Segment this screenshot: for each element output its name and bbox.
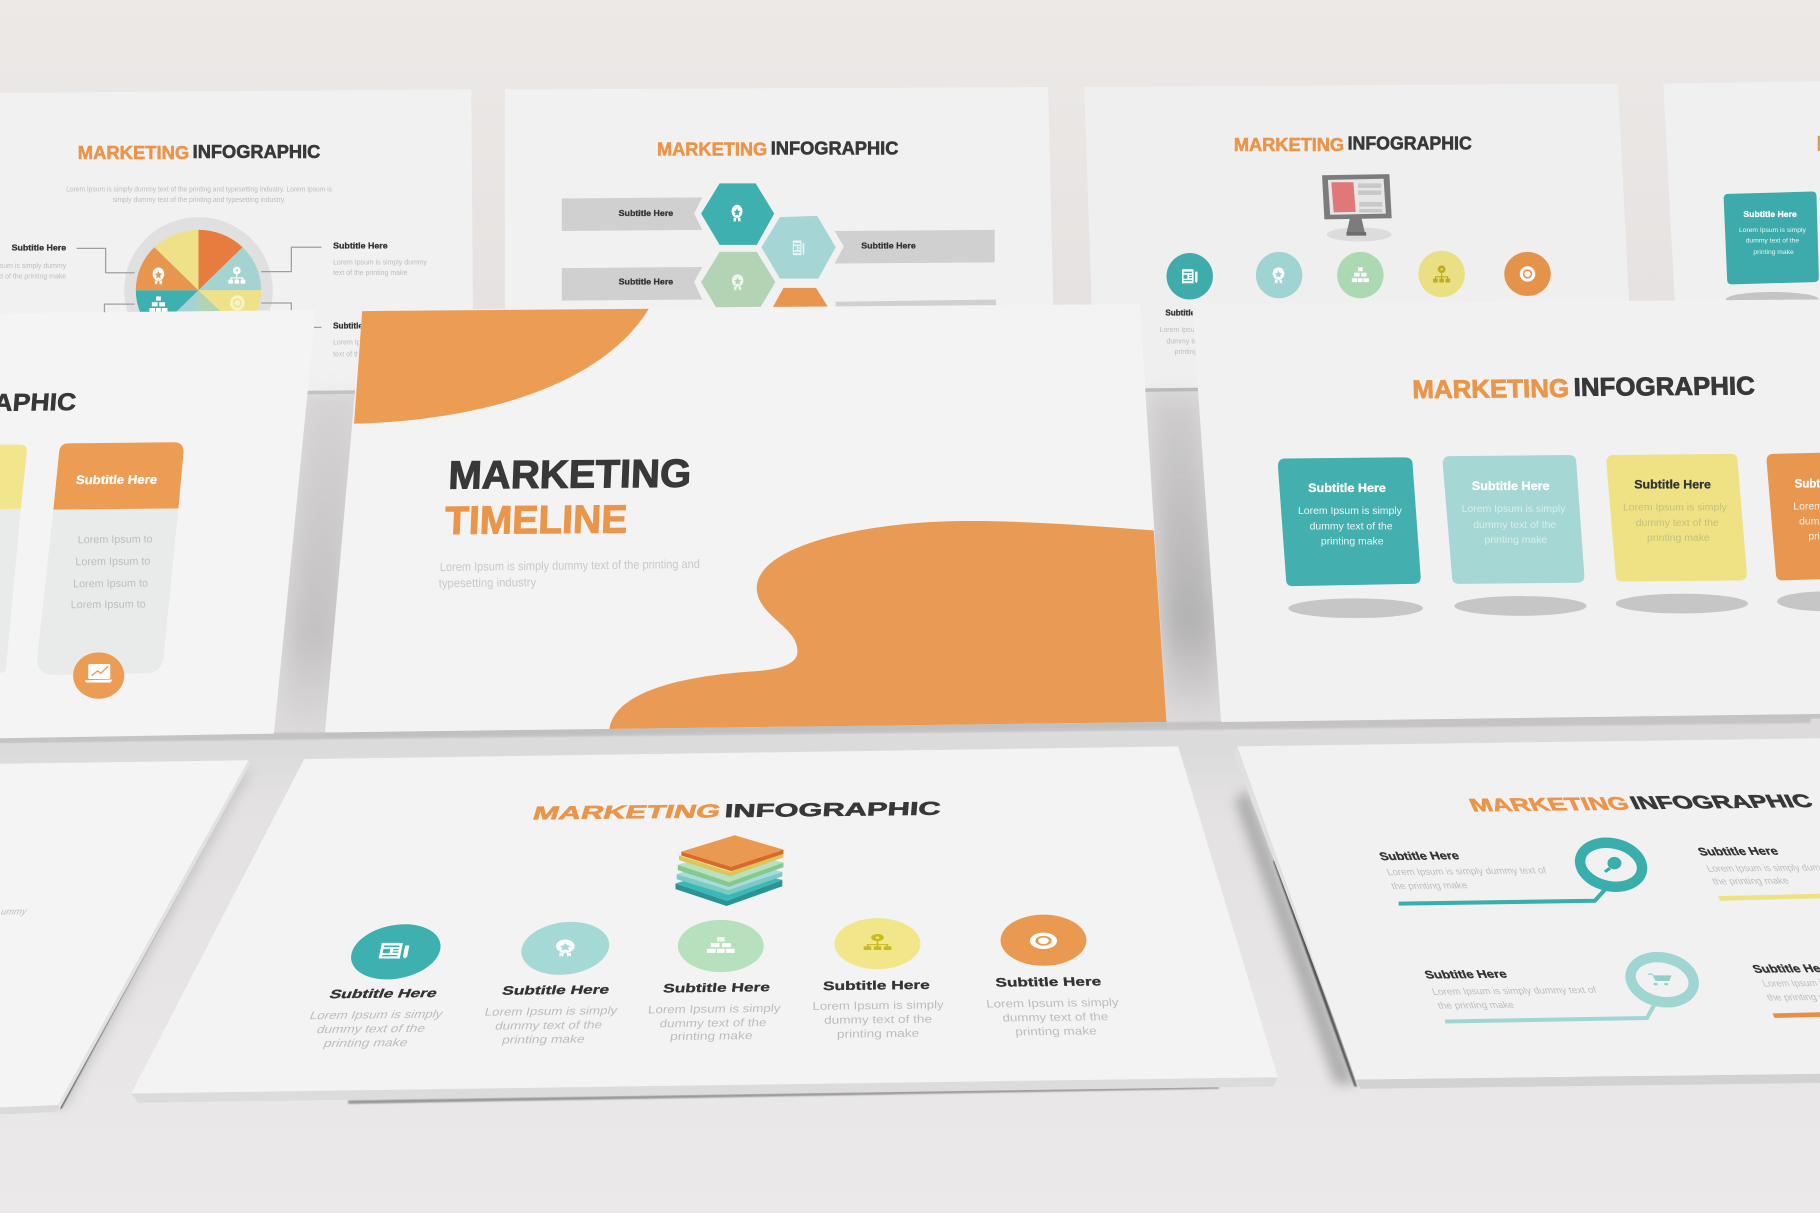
clipped label bbox=[1160, 309, 1203, 356]
hexagons bbox=[701, 183, 836, 348]
icon: stacked layers bbox=[676, 835, 783, 906]
teal card bbox=[1724, 192, 1819, 284]
column 5: Subtitle Here bbox=[995, 974, 1102, 990]
light teal card: Lorem Ipsum is simply bbox=[1462, 504, 1566, 515]
pin 2 yellow: Subtitle Here bbox=[1696, 845, 1781, 858]
orange column: Lorem Ipsum to bbox=[75, 556, 150, 568]
pin 1 teal: the printing make bbox=[1390, 881, 1469, 892]
heading bbox=[444, 452, 692, 543]
right subtitle and text: Lorem Ipsum bbox=[333, 340, 374, 347]
teal card: Lorem Ipsum is simply bbox=[1298, 506, 1403, 517]
slide: card top right bbox=[1663, 81, 1820, 348]
slide: four cards bbox=[1192, 299, 1820, 727]
column 4: dummy text of the bbox=[824, 1013, 932, 1027]
column 4: Lorem Ipsum is simply bbox=[813, 999, 944, 1013]
yellow card: Subtitle Here bbox=[1634, 479, 1711, 492]
light teal card bbox=[1443, 455, 1584, 584]
orange column bbox=[37, 442, 184, 699]
ribbon labels: Subtitle Here bbox=[619, 209, 674, 218]
slide: bottom left fragment bbox=[0, 760, 251, 1114]
column 3: printing make bbox=[669, 1030, 753, 1043]
clipped label: printing bbox=[1175, 349, 1198, 356]
pin 2 yellow bbox=[1696, 845, 1820, 901]
teal card: Subtitle Here bbox=[1743, 210, 1797, 219]
column 3: dummy text of the bbox=[659, 1017, 767, 1030]
column 1 bbox=[308, 917, 445, 1050]
orange column: Lorem Ipsum to bbox=[71, 598, 146, 611]
column 3: Lorem Ipsum is simply bbox=[647, 1003, 782, 1016]
pin 3 light teal: Subtitle Here bbox=[1423, 969, 1509, 981]
yellow column bbox=[0, 445, 27, 673]
clipped label: dummy text bbox=[1167, 339, 1203, 346]
title: INFOGRAPHIC bbox=[724, 798, 942, 821]
column 1: printing make bbox=[322, 1037, 410, 1050]
column 2 bbox=[483, 917, 619, 1046]
column 2: Subtitle Here bbox=[501, 983, 611, 998]
slide: pie chart infographic bbox=[0, 89, 474, 398]
teal card: dummy text of the bbox=[1746, 238, 1799, 245]
ribbons bbox=[562, 197, 996, 313]
yellow card: dummy text of the bbox=[1636, 518, 1719, 529]
title: INFOGRAPHIC bbox=[193, 141, 320, 162]
heading: TIMELINE bbox=[444, 498, 628, 543]
intro text: simply dummy text of the printing and typesetting industry. bbox=[113, 195, 286, 204]
decorative blob: bottom bbox=[609, 521, 1167, 729]
left subtitle and text bbox=[0, 244, 67, 281]
yellow card bbox=[1606, 454, 1747, 582]
column 5: dummy text of the bbox=[1002, 1011, 1109, 1024]
pin 3 light teal: Lorem Ipsum is simply dummy text of bbox=[1430, 985, 1599, 998]
intro text: Lorem Ipsum is simply dummy text of the printing and typesetting industry. Lorem Ipsum is bbox=[66, 185, 332, 194]
column 1: Lorem Ipsum is simply bbox=[308, 1009, 445, 1022]
ribbon labels: Subtitle Here bbox=[861, 241, 916, 250]
slide: timeline pins bbox=[1234, 738, 1820, 1089]
pie chart bbox=[124, 217, 273, 363]
title: INFOGRAPHIC bbox=[1627, 792, 1817, 814]
teal card: dummy text of the bbox=[1310, 521, 1393, 532]
pin 4 orange bbox=[1750, 962, 1820, 1018]
title: MARKETING bbox=[657, 139, 767, 160]
title bbox=[1412, 372, 1755, 404]
title: MARKETING bbox=[1234, 134, 1344, 155]
column 2: dummy text of the bbox=[494, 1019, 603, 1033]
pin 2 yellow: the printing make bbox=[1711, 876, 1792, 887]
right subtitle and text: text of the printing make bbox=[333, 270, 407, 277]
card shadows bbox=[1288, 591, 1820, 618]
title: MARKETING bbox=[1412, 375, 1569, 404]
yellow card: printing make bbox=[1647, 533, 1710, 544]
yellow card: Lorem Ipsum is simply bbox=[1623, 503, 1728, 514]
right subtitle and text: text of the bbox=[333, 351, 364, 358]
right subtitle and text: Subtitle Here bbox=[333, 241, 388, 250]
icon circles bbox=[1167, 251, 1551, 299]
slide: hexagon infographic bbox=[505, 87, 1055, 389]
light teal card: printing make bbox=[1485, 535, 1547, 546]
cover text bbox=[439, 557, 700, 590]
column 5: Lorem Ipsum is simply bbox=[986, 997, 1120, 1011]
teal card: Subtitle Here bbox=[1308, 482, 1386, 495]
title bbox=[1466, 792, 1817, 816]
teal card: Lorem Ipsum is simply bbox=[1739, 227, 1806, 234]
title: MARKETING bbox=[78, 142, 189, 163]
orange column: Subtitle Here bbox=[75, 473, 158, 487]
title: MARKETING bbox=[1466, 794, 1633, 816]
title bbox=[530, 798, 942, 824]
pin 3 light teal: the printing make bbox=[1436, 1000, 1516, 1012]
teal card: printing make bbox=[1753, 249, 1794, 256]
right subtitle and text: Subtitle Here bbox=[333, 321, 384, 330]
connector arrows bbox=[77, 247, 322, 327]
icon: monitor bbox=[1322, 174, 1392, 241]
pin 3 light teal bbox=[1423, 951, 1698, 1021]
teal card: printing make bbox=[1321, 536, 1384, 547]
decorative blob: top bbox=[354, 309, 649, 424]
teal card bbox=[1278, 457, 1421, 586]
title: INFOGRAPHIC bbox=[1348, 133, 1472, 154]
slide: monitor infographic bbox=[1084, 84, 1633, 392]
clipped label: Lorem Ipsum bbox=[1160, 327, 1200, 334]
clipped label: Subtitle bbox=[1165, 309, 1196, 318]
title: INFOGRAPHIC bbox=[771, 137, 898, 158]
column 1: Subtitle Here bbox=[327, 986, 440, 1001]
light teal card: Subtitle Here bbox=[1472, 480, 1550, 493]
pin 1 teal: Lorem Ipsum is simply dummy text of bbox=[1385, 866, 1549, 878]
title: INFOGRAPHIC bbox=[1573, 372, 1755, 402]
shadows behind the bottom row bbox=[46, 768, 1357, 1109]
slide: cover marketing timeline bbox=[325, 304, 1167, 737]
column 4: Subtitle Here bbox=[823, 978, 930, 993]
slide: left column cards bbox=[0, 310, 316, 743]
orange card bbox=[1767, 453, 1820, 580]
right subtitle and text: Lorem Ipsum is simply dummy bbox=[333, 260, 428, 267]
left subtitle and text: Subtitle Here bbox=[12, 244, 67, 253]
column 3 bbox=[647, 920, 782, 1043]
ribbon labels: Subtitle Here bbox=[619, 277, 674, 286]
column 1: dummy text of the bbox=[315, 1023, 427, 1036]
shadows behind the middle row bbox=[0, 395, 1811, 743]
intro text bbox=[66, 185, 332, 204]
orange column: Lorem Ipsum to bbox=[73, 578, 148, 590]
orange column: Lorem Ipsum to bbox=[78, 533, 153, 546]
column 3: Subtitle Here bbox=[662, 980, 771, 995]
column 5: printing make bbox=[1015, 1025, 1097, 1038]
pin 1 teal bbox=[1378, 837, 1646, 904]
column 4: printing make bbox=[837, 1028, 919, 1041]
slide: stacked layers infographic bbox=[131, 746, 1278, 1103]
pin 1 teal: Subtitle Here bbox=[1378, 851, 1461, 863]
light teal card: dummy text of the bbox=[1473, 520, 1556, 531]
column 5 bbox=[986, 915, 1120, 1038]
heading: MARKETING bbox=[448, 452, 692, 498]
card shadow bbox=[1726, 292, 1819, 307]
title: MARKETING bbox=[530, 802, 723, 824]
right subtitle and text bbox=[333, 241, 428, 358]
cover text: typesetting industry bbox=[439, 575, 537, 590]
column 4 bbox=[812, 918, 944, 1041]
ribbon labels bbox=[619, 209, 916, 286]
column 2: printing make bbox=[501, 1034, 586, 1046]
cover text: Lorem Ipsum is simply dummy text of the printing and bbox=[440, 557, 700, 574]
column 2: Lorem Ipsum is simply bbox=[483, 1005, 619, 1019]
